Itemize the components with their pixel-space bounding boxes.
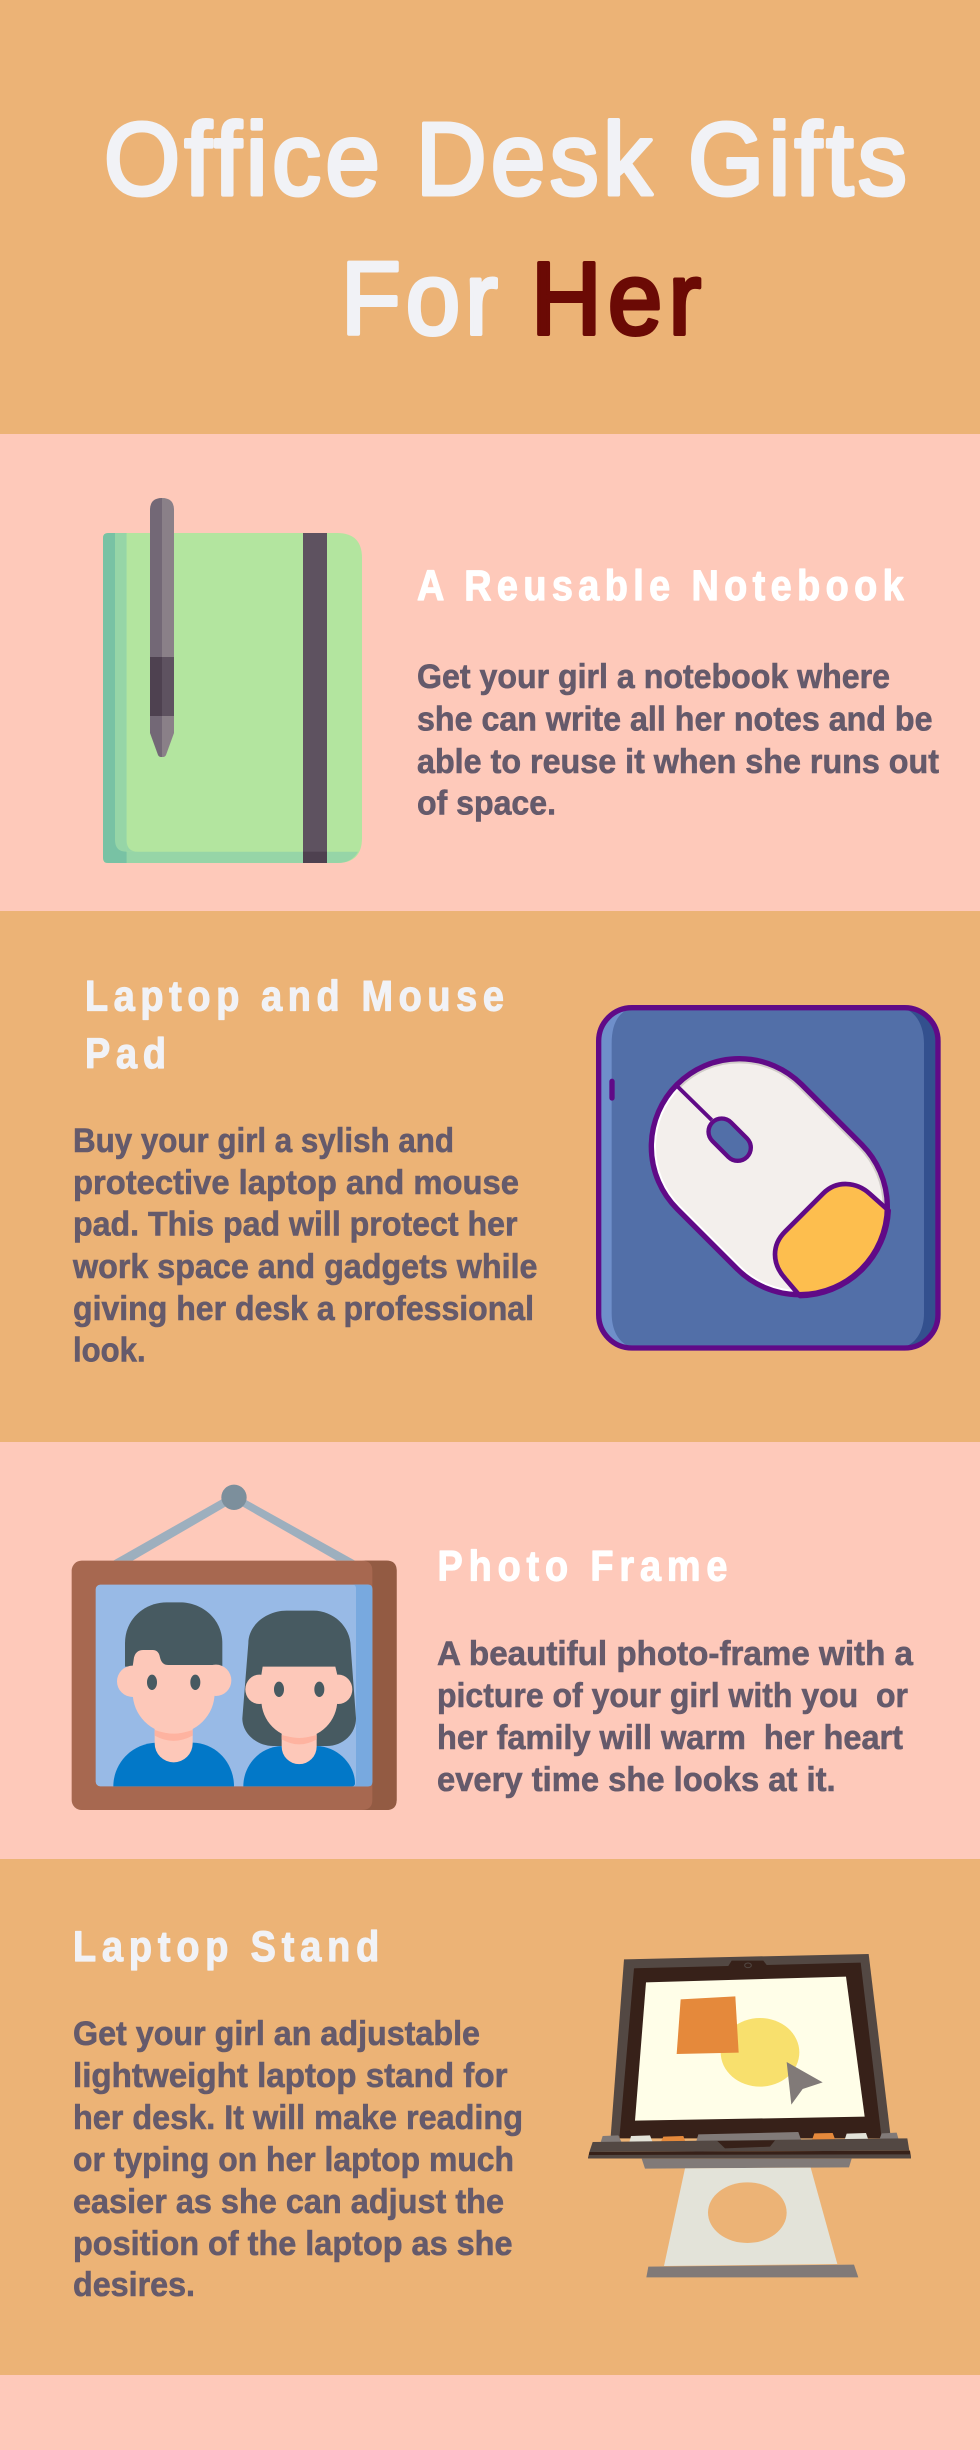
text block — [417, 658, 939, 822]
text block: work space and gadgets while — [72, 1248, 537, 1286]
text block — [73, 2015, 523, 2304]
icon: mouse pad with mouse — [596, 1005, 941, 1351]
text block: Get your girl an adjustable — [73, 2015, 480, 2053]
panel: reusable notebook — [0, 434, 980, 911]
text block: able to reuse it when she runs out — [417, 743, 939, 781]
title — [104, 102, 907, 357]
text block: her desk. It will make reading — [73, 2099, 523, 2137]
text block: of space. — [417, 784, 556, 822]
heading: Laptop Stand — [73, 1922, 379, 1971]
panel: photo frame — [0, 1442, 980, 1859]
text block: easier as she can adjust the — [73, 2183, 504, 2221]
text block: desires. — [73, 2266, 195, 2304]
text block: lightweight laptop stand for — [73, 2057, 508, 2095]
text block: protective laptop and mouse — [73, 1164, 519, 1202]
text block: look. — [73, 1332, 146, 1370]
heading: Laptop and Mouse — [85, 971, 504, 1020]
text block: Get your girl a notebook where — [417, 658, 890, 696]
title: Office Desk Gifts — [104, 102, 907, 217]
title: Her — [531, 242, 701, 357]
panel: laptop and mouse pad — [72, 978, 941, 1362]
text block — [437, 1635, 914, 1799]
text block: her family will warm her heart — [437, 1719, 903, 1757]
text block: giving her desk a professional — [73, 1290, 534, 1328]
panel: laptop stand — [0, 1859, 980, 2375]
icon: framed photo — [72, 1485, 397, 1810]
text block: picture of your girl with you or — [437, 1677, 908, 1715]
heading — [85, 971, 504, 1078]
icon: notebook with pen — [103, 498, 362, 863]
heading: A Reusable Notebook — [417, 561, 904, 610]
heading: Photo Frame — [438, 1541, 727, 1590]
text block: A beautiful photo-frame with a — [437, 1635, 914, 1673]
panel: title banner — [0, 0, 980, 434]
text block: position of the laptop as she — [73, 2225, 512, 2263]
text block: she can write all her notes and be — [417, 700, 932, 738]
text block: every time she looks at it. — [437, 1761, 836, 1799]
text block: or typing on her laptop much — [73, 2141, 514, 2179]
icon: laptop on stand — [588, 1954, 911, 2277]
title: For — [341, 242, 498, 357]
text block — [72, 1122, 537, 1370]
text block: pad. This pad will protect her — [73, 1206, 518, 1244]
heading: Pad — [85, 1029, 166, 1078]
text block: Buy your girl a sylish and — [73, 1122, 454, 1160]
